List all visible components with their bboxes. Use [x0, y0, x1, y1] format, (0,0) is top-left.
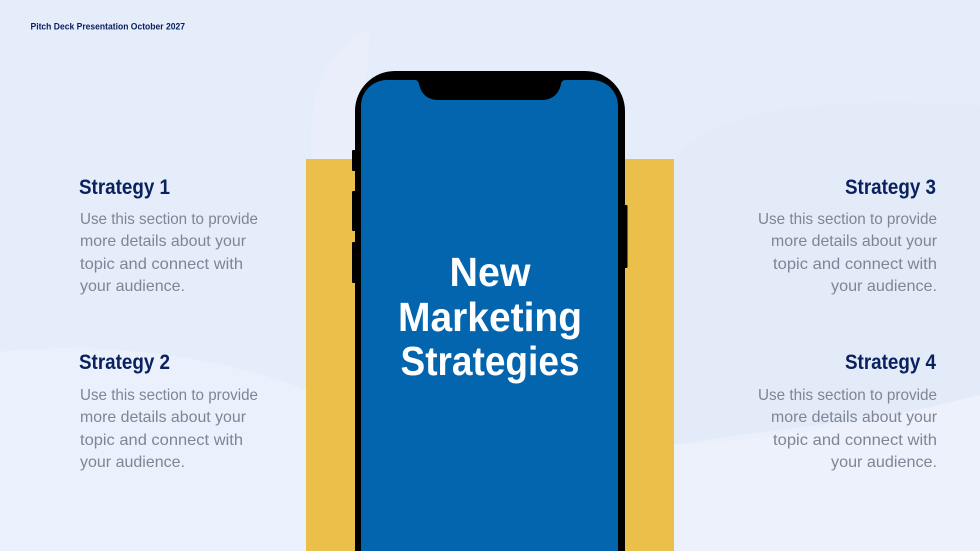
strategy 3 — [758, 176, 938, 295]
strategy 2: topic and connect with — [80, 432, 243, 449]
headline: Marketing — [398, 294, 582, 340]
strategy 4: Use this section to provide — [758, 387, 937, 404]
strategy 4: topic and connect with — [773, 432, 937, 449]
strategy 4: more details about your — [771, 409, 938, 426]
phone — [352, 71, 628, 551]
strategy 4: Strategy 4 — [845, 351, 936, 374]
deck label: Pitch Deck Presentation October 2027 — [30, 22, 185, 32]
strategy 1: Use this section to provide — [80, 211, 258, 228]
yellow backdrop — [306, 159, 674, 551]
phone screen — [361, 80, 618, 551]
strategy 4 — [758, 351, 938, 471]
strategy 1: topic and connect with — [80, 256, 243, 273]
strategy 1 — [79, 176, 258, 295]
strategy 3: topic and connect with — [773, 256, 937, 273]
strategy 3: Use this section to provide — [758, 211, 937, 228]
headline — [398, 249, 582, 384]
strategy 3: more details about your — [771, 233, 938, 250]
strategy 2: more details about your — [80, 409, 247, 426]
strategy 2: your audience. — [80, 454, 185, 471]
strategy 2 — [79, 351, 258, 471]
strategy 1: more details about your — [80, 233, 247, 250]
strategy 3: your audience. — [831, 278, 937, 295]
strategy 2: Use this section to provide — [80, 387, 258, 404]
strategy 1: Strategy 1 — [79, 176, 170, 199]
strategy 4: your audience. — [831, 454, 937, 471]
phone side buttons — [352, 150, 628, 283]
strategy 3: Strategy 3 — [845, 176, 936, 199]
headline: New — [450, 249, 531, 295]
strategy 1: your audience. — [80, 278, 185, 295]
strategy 2: Strategy 2 — [79, 351, 170, 374]
headline: Strategies — [400, 338, 580, 384]
phone body — [355, 71, 625, 551]
